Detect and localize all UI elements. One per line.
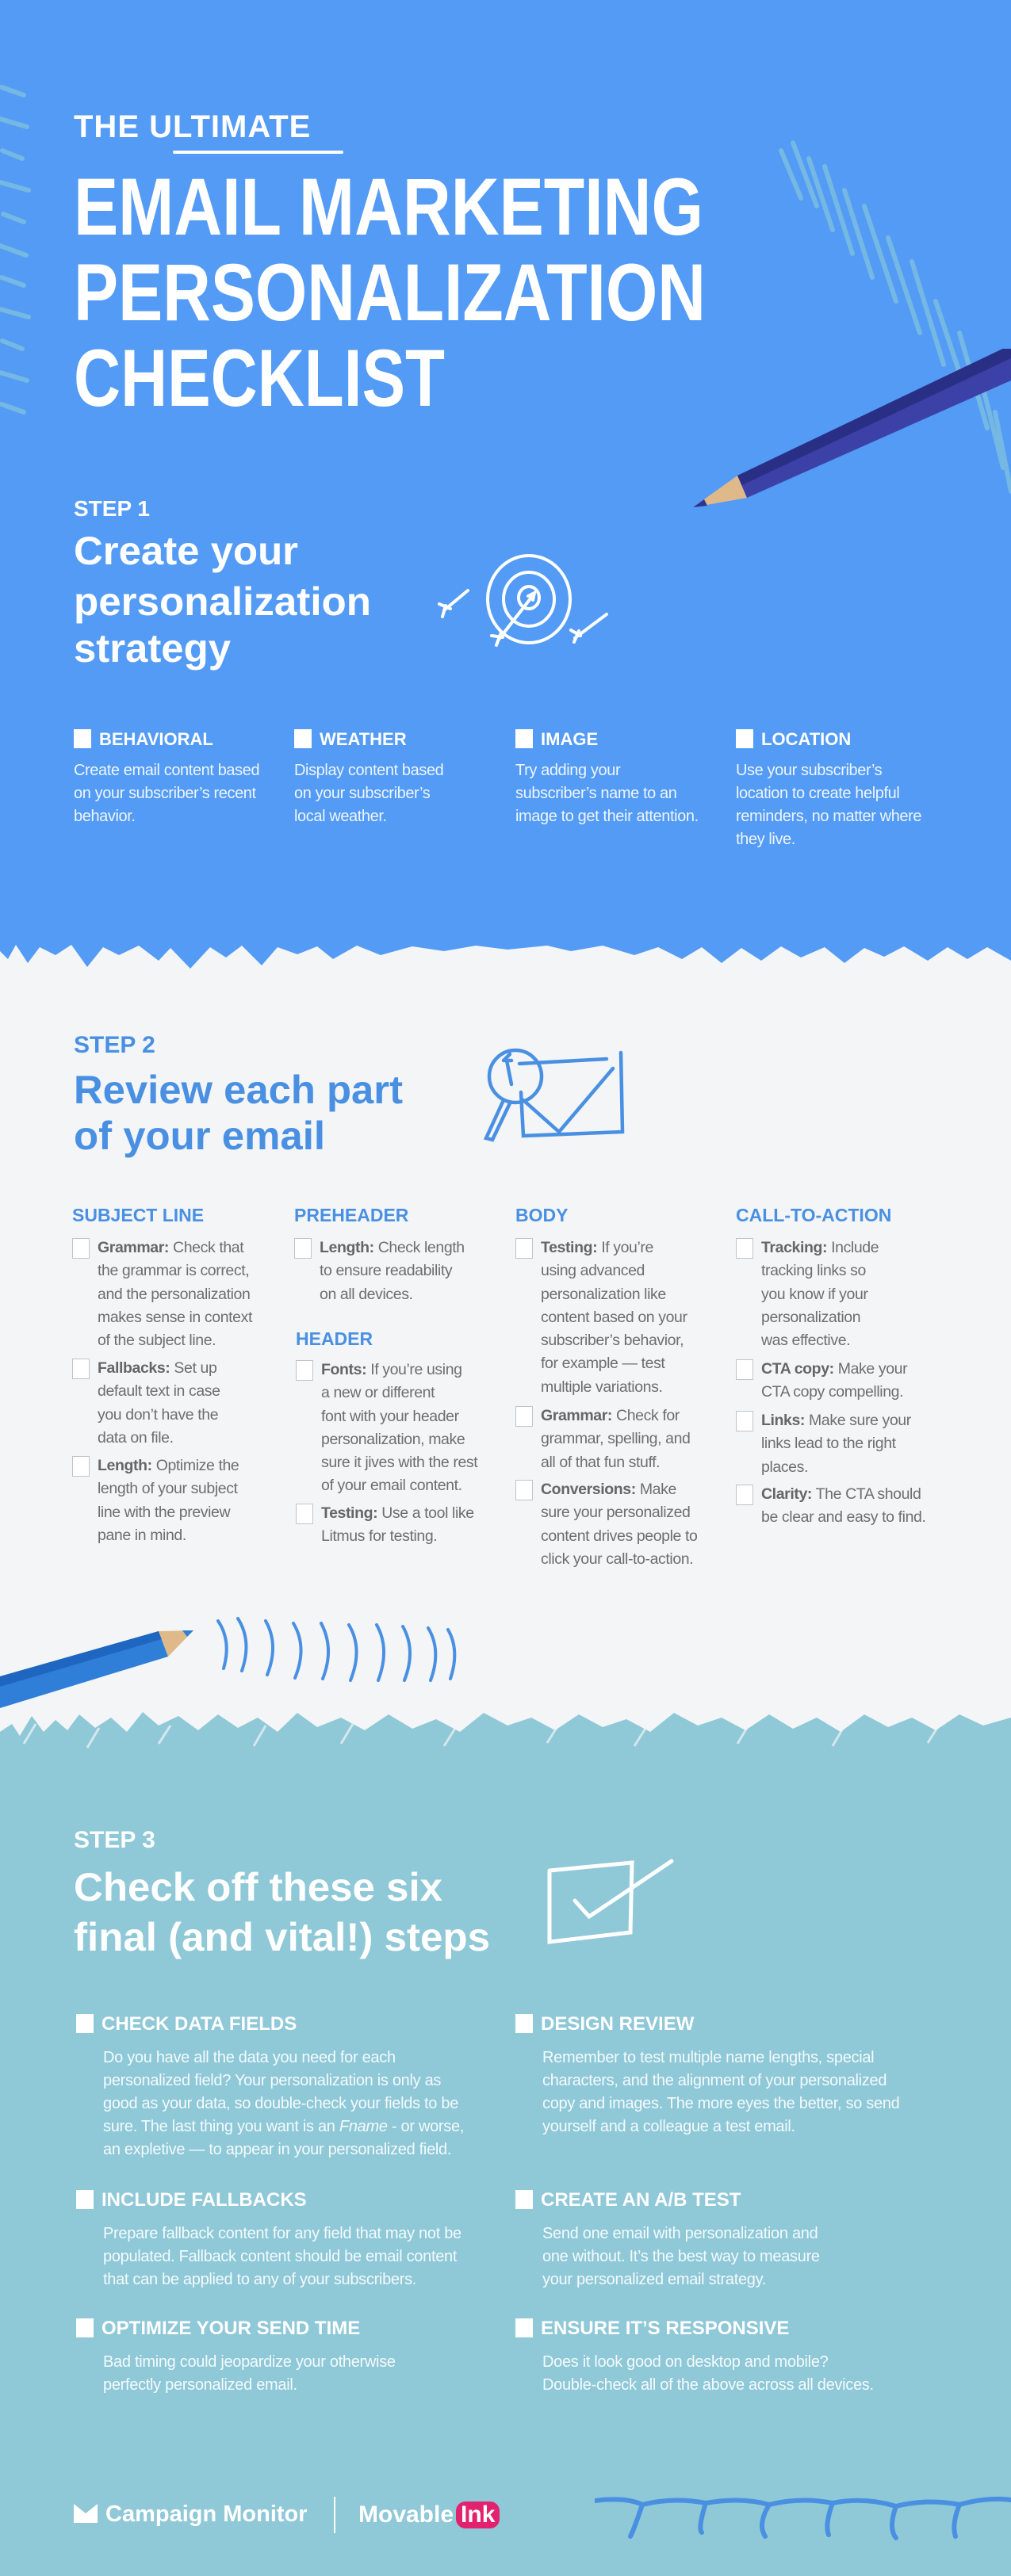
title: the ultimate: [74, 109, 343, 154]
item: weather: Display content based: [294, 762, 443, 779]
item: ensure responsive: ENSURE IT’S RESPONSIVE: [541, 2318, 789, 2339]
pencil top: [693, 349, 1011, 507]
item: location: [736, 729, 921, 848]
item: image: IMAGE: [541, 729, 598, 749]
column: body: for example — test: [541, 1355, 664, 1372]
column: body: content drives people to: [541, 1527, 697, 1545]
item: location: LOCATION: [761, 729, 851, 749]
item: ensure responsive: Does it look good on desktop and mobile?: [542, 2353, 828, 2371]
column: call-to-action: tracking links so: [761, 1262, 866, 1279]
item: behavioral: [74, 729, 259, 825]
step 1 heading: personalization: [74, 579, 371, 624]
section 3 background: [0, 1744, 1011, 2576]
section 2 background: [0, 943, 1011, 1752]
column: body: BODY: [515, 1205, 568, 1225]
step 2 heading: [74, 1068, 403, 1158]
item: include fallbacks: that can be applied to any of your subscribers.: [103, 2271, 416, 2288]
column: body: all of that fun stuff.: [541, 1454, 660, 1471]
column: call-to-action: links lead to the right: [761, 1435, 896, 1452]
column: preheader and header: on all devices.: [320, 1286, 413, 1303]
item: design review: yourself and a colleague a test email.: [542, 2118, 795, 2135]
item: include fallbacks: populated. Fallback content should be email content: [103, 2248, 457, 2265]
column: preheader and header: to ensure readability: [320, 1262, 452, 1279]
column: preheader and header: personalization, make: [321, 1431, 465, 1448]
column: preheader and header: HEADER: [296, 1328, 373, 1349]
column: body: personalization like: [541, 1286, 666, 1303]
column: preheader and header: Testing: Use a tool like: [321, 1504, 474, 1522]
jagged edge: [0, 935, 1011, 969]
item: optimize send time: perfectly personalized email.: [103, 2376, 297, 2394]
item: create an a/b test: one without. It’s the best way to measure: [542, 2248, 820, 2265]
column: body: Grammar: Check for: [541, 1407, 680, 1424]
column: subject line: Fallbacks: Set up: [98, 1359, 216, 1377]
icon: target with arrows: [438, 554, 609, 647]
pencil bottom with motion lines: [0, 1617, 457, 1708]
item: check data fields: personalized field? Your personalization is only as: [103, 2072, 441, 2089]
column: subject line: of the subject line.: [98, 1332, 216, 1349]
item: design review: DESIGN REVIEW: [541, 2013, 694, 2035]
item: create an a/b test: [515, 2189, 820, 2288]
column: preheader and header: [294, 1205, 477, 1545]
column: call-to-action: CALL-TO-ACTION: [736, 1205, 891, 1225]
column: call-to-action: places.: [761, 1458, 808, 1476]
section 1 background: [0, 0, 1011, 943]
column: subject line: data on file.: [98, 1429, 174, 1447]
column: body: sure your personalized: [541, 1504, 690, 1521]
column: body: Conversions: Make: [541, 1481, 676, 1498]
column: subject line: length of your subject: [98, 1480, 238, 1497]
item: check data fields: an expletive — to appear in your personalized field.: [103, 2141, 451, 2158]
item: image: subscriber’s name to an: [515, 785, 677, 802]
item: optimize send time: Bad timing could jeopardize your otherwise: [103, 2353, 396, 2371]
panel: step 1 checklist: [74, 729, 921, 848]
item: behavioral: behavior.: [74, 808, 136, 825]
item: location: reminders, no matter where: [736, 808, 921, 825]
item: location: Use your subscriber’s: [736, 762, 882, 779]
icon: checkbox: [547, 1859, 674, 1944]
item: create an a/b test: CREATE AN A/B TEST: [541, 2189, 741, 2211]
icon: magnifier and envelope: [484, 1048, 625, 1142]
item: location: they live.: [736, 831, 795, 848]
column: subject line: makes sense in context: [98, 1309, 252, 1326]
item: design review: [515, 2013, 899, 2135]
column: call-to-action: Clarity: The CTA should: [761, 1485, 921, 1503]
footer logos: [74, 2497, 500, 2533]
column: body: subscriber’s behavior,: [541, 1332, 684, 1349]
title: main heading: [74, 162, 706, 420]
column: call-to-action: personalization: [761, 1309, 860, 1326]
item: ensure responsive: Double-check all of the above across all devices.: [542, 2376, 874, 2394]
item: check data fields: good as your data, so double-check your fields to be: [103, 2095, 458, 2112]
column: subject line: the grammar is correct,: [98, 1262, 249, 1279]
logo: movable ink: Movable: [358, 2501, 454, 2528]
logo: movable ink: [358, 2501, 500, 2528]
logo: campaign monitor: Campaign Monitor: [105, 2501, 308, 2527]
title: the ultimate: THE ULTIMATE: [74, 109, 311, 144]
column: preheader and header: sure it jives with the rest: [321, 1454, 477, 1471]
column: body: Testing: If you’re: [541, 1239, 653, 1256]
item: include fallbacks: INCLUDE FALLBACKS: [101, 2189, 307, 2211]
column: call-to-action: Links: Make sure your: [761, 1412, 911, 1429]
column: subject line: and the personalization: [98, 1286, 250, 1303]
column: preheader and header: Length: Check length: [320, 1239, 465, 1256]
chalk scribbles top: [0, 85, 1011, 969]
column: body: content based on your: [541, 1309, 687, 1326]
column: call-to-action: be clear and easy to find.: [761, 1508, 926, 1526]
chalk edge: [0, 1712, 1011, 1749]
item: check data fields: CHECK DATA FIELDS: [101, 2013, 297, 2035]
item: check data fields: [76, 2013, 464, 2158]
step 3 heading: [74, 1865, 490, 1959]
column: preheader and header: Fonts: If you’re using: [321, 1361, 462, 1378]
column: subject line: default text in case: [98, 1382, 220, 1400]
item: check data fields: Do you have all the data you need for each: [103, 2049, 396, 2066]
column: subject line: pane in mind.: [98, 1527, 186, 1544]
column: preheader and header: a new or different: [321, 1384, 435, 1401]
item: behavioral: on your subscriber’s recent: [74, 785, 256, 802]
step 2 label: STEP 2: [74, 1032, 155, 1058]
column: subject line: SUBJECT LINE: [72, 1205, 204, 1225]
column: call-to-action: was effective.: [761, 1332, 850, 1349]
item: behavioral: Create email content based: [74, 762, 259, 779]
item: create an a/b test: Send one email with personalization and: [542, 2225, 818, 2242]
column: call-to-action: CTA copy compelling.: [761, 1383, 903, 1401]
column: subject line: Grammar: Check that: [98, 1239, 243, 1256]
panel: step 3 items: [76, 2013, 899, 2394]
column: preheader and header: font with your header: [321, 1408, 459, 1425]
column: subject line: [72, 1205, 252, 1544]
item: weather: on your subscriber’s: [294, 785, 430, 802]
step 1 heading: Create your: [74, 529, 298, 573]
step 3 heading: final (and vital!) steps: [74, 1915, 490, 1959]
step 2 heading: Review each part: [74, 1068, 403, 1112]
item: image: Try adding your: [515, 762, 620, 779]
item: behavioral: BEHAVIORAL: [99, 729, 213, 749]
step 1 heading: [74, 529, 371, 671]
squiggle: [595, 2497, 1011, 2540]
column: body: using advanced: [541, 1262, 645, 1279]
step 2 heading: of your email: [74, 1114, 325, 1158]
column: body: click your call-to-action.: [541, 1550, 693, 1568]
item: design review: characters, and the alignment of your personalized: [542, 2072, 887, 2089]
logo: movable ink: Ink: [461, 2501, 495, 2528]
item: ensure responsive: [515, 2318, 874, 2394]
item: optimize send time: [76, 2318, 396, 2394]
item: optimize send time: OPTIMIZE YOUR SEND TIME: [101, 2318, 360, 2339]
column: preheader and header: of your email content.: [321, 1477, 462, 1494]
item: create an a/b test: your personalized email strategy.: [542, 2271, 766, 2288]
step 3 heading: Check off these six: [74, 1865, 442, 1909]
item: check data fields: sure. The last thing you want is an Fname - or worse,: [103, 2118, 464, 2135]
column: body: grammar, spelling, and: [541, 1430, 690, 1447]
column: subject line: Length: Optimize the: [98, 1457, 239, 1474]
column: body: [515, 1205, 697, 1568]
item: include fallbacks: Prepare fallback content for any field that may not be: [103, 2225, 461, 2242]
step 1 label: STEP 1: [74, 496, 150, 521]
item: image: [515, 729, 699, 825]
item: design review: copy and images. The more eyes the better, so send: [542, 2095, 899, 2112]
column: preheader and header: PREHEADER: [294, 1205, 408, 1225]
item: design review: Remember to test multiple name lengths, special: [542, 2049, 874, 2066]
column: subject line: line with the preview: [98, 1504, 230, 1521]
column: call-to-action: you know if your: [761, 1286, 867, 1303]
column: body: multiple variations.: [541, 1378, 663, 1396]
column: subject line: you don’t have the: [98, 1406, 218, 1424]
column: preheader and header: Litmus for testing.: [321, 1527, 437, 1545]
item: weather: [294, 729, 443, 825]
step 3 label: STEP 3: [74, 1827, 155, 1853]
column: call-to-action: Tracking: Include: [761, 1239, 879, 1256]
column: call-to-action: CTA copy: Make your: [761, 1360, 907, 1378]
item: location: location to create helpful: [736, 785, 899, 802]
item: weather: WEATHER: [320, 729, 407, 749]
step 1 heading: strategy: [74, 626, 231, 671]
item: include fallbacks: [76, 2189, 461, 2288]
item: weather: local weather.: [294, 808, 387, 825]
column: call-to-action: [736, 1205, 926, 1526]
item: image: image to get their attention.: [515, 808, 699, 825]
